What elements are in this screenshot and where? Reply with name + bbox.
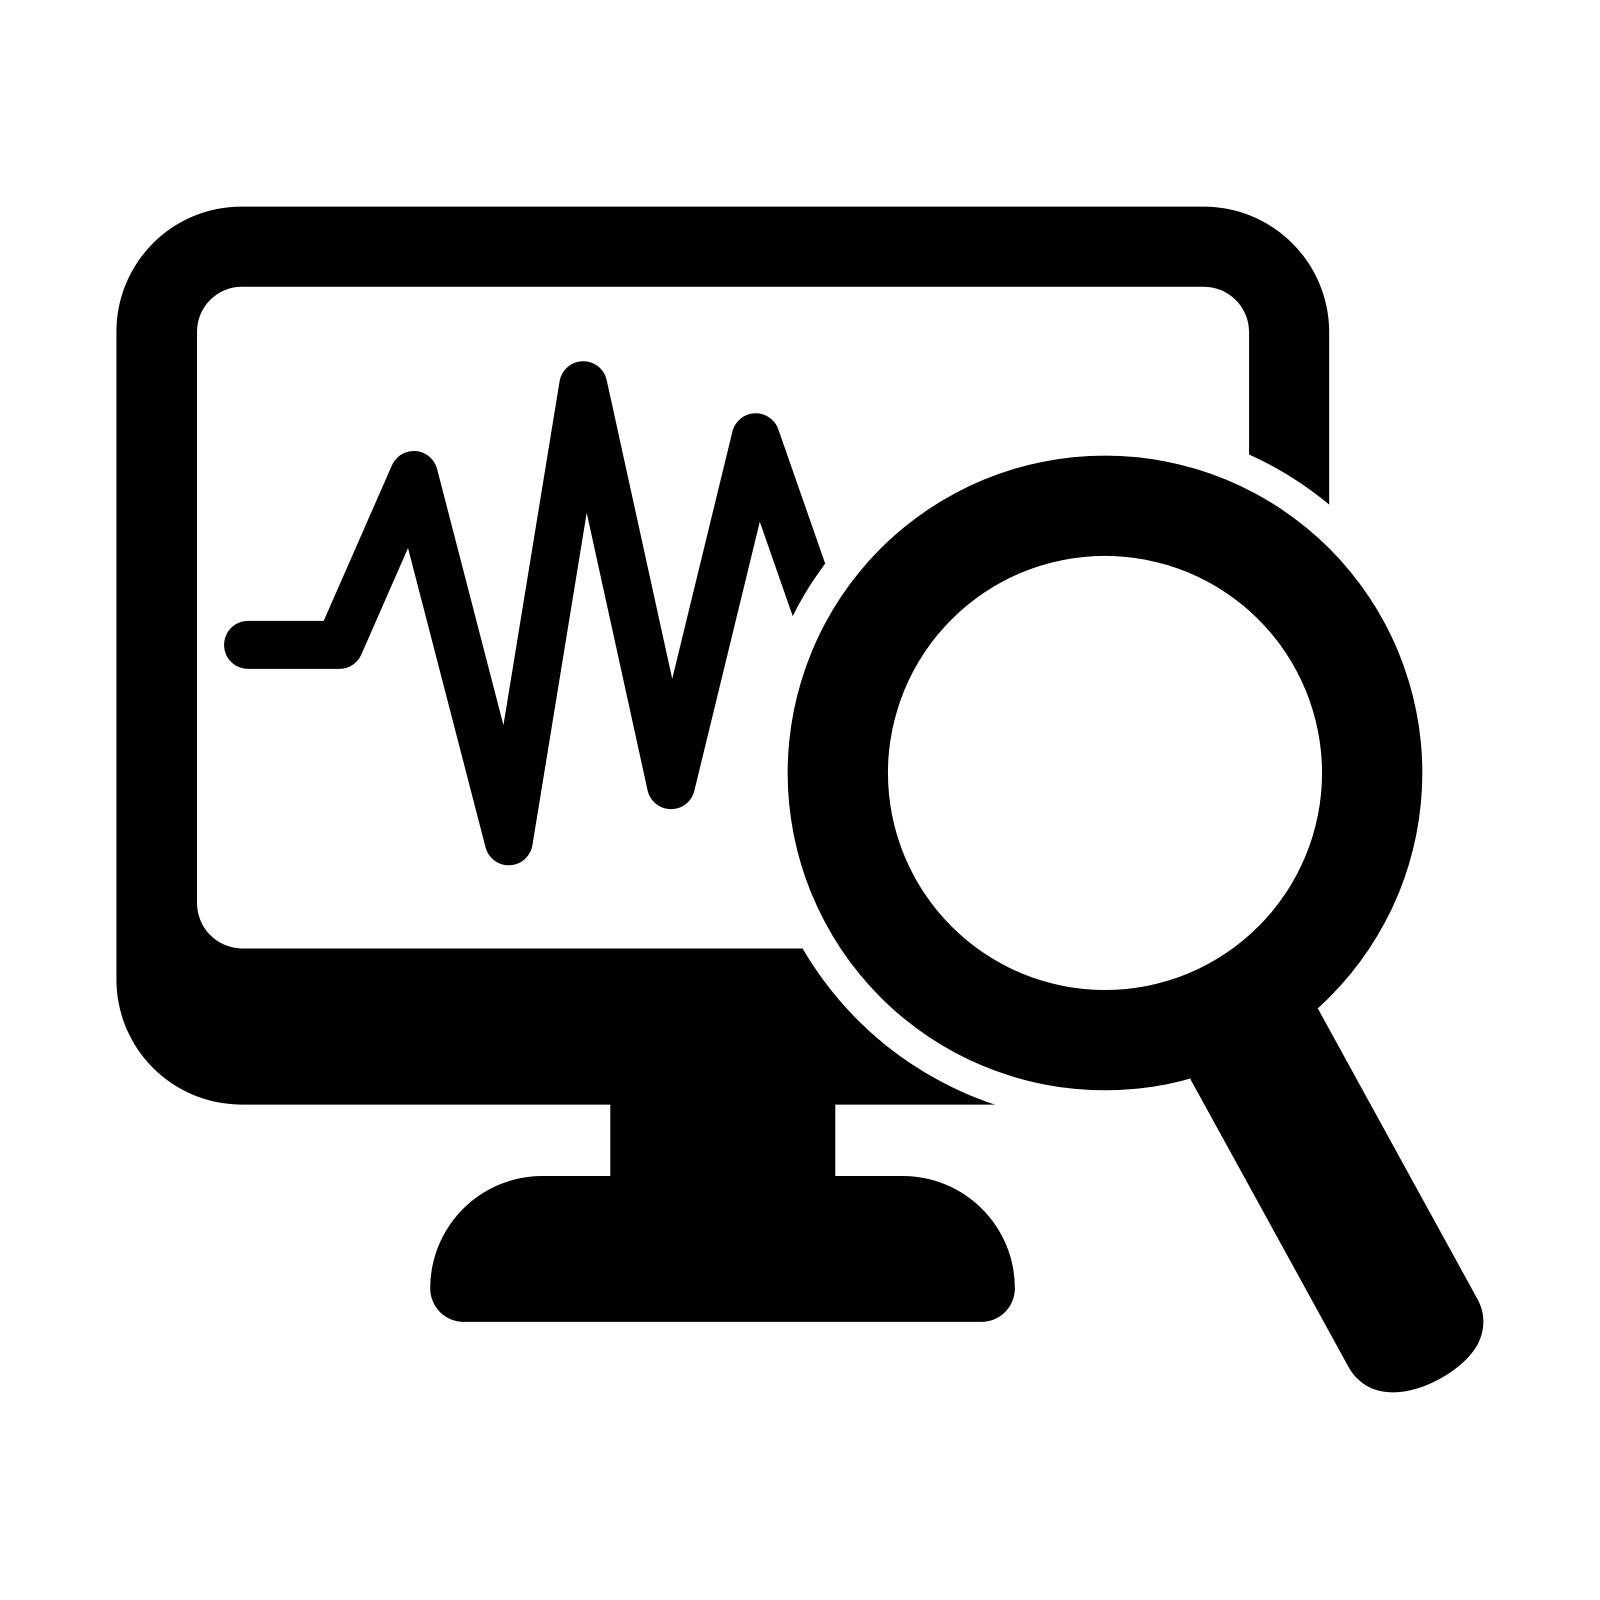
halo around magnifying glass xyxy=(755,423,1454,1122)
chart: pulse line on screen xyxy=(248,385,817,841)
magnifying glass lens ring xyxy=(788,456,1422,1090)
monitor with stand xyxy=(116,207,1329,1322)
magnifying glass handle xyxy=(1190,1009,1483,1392)
